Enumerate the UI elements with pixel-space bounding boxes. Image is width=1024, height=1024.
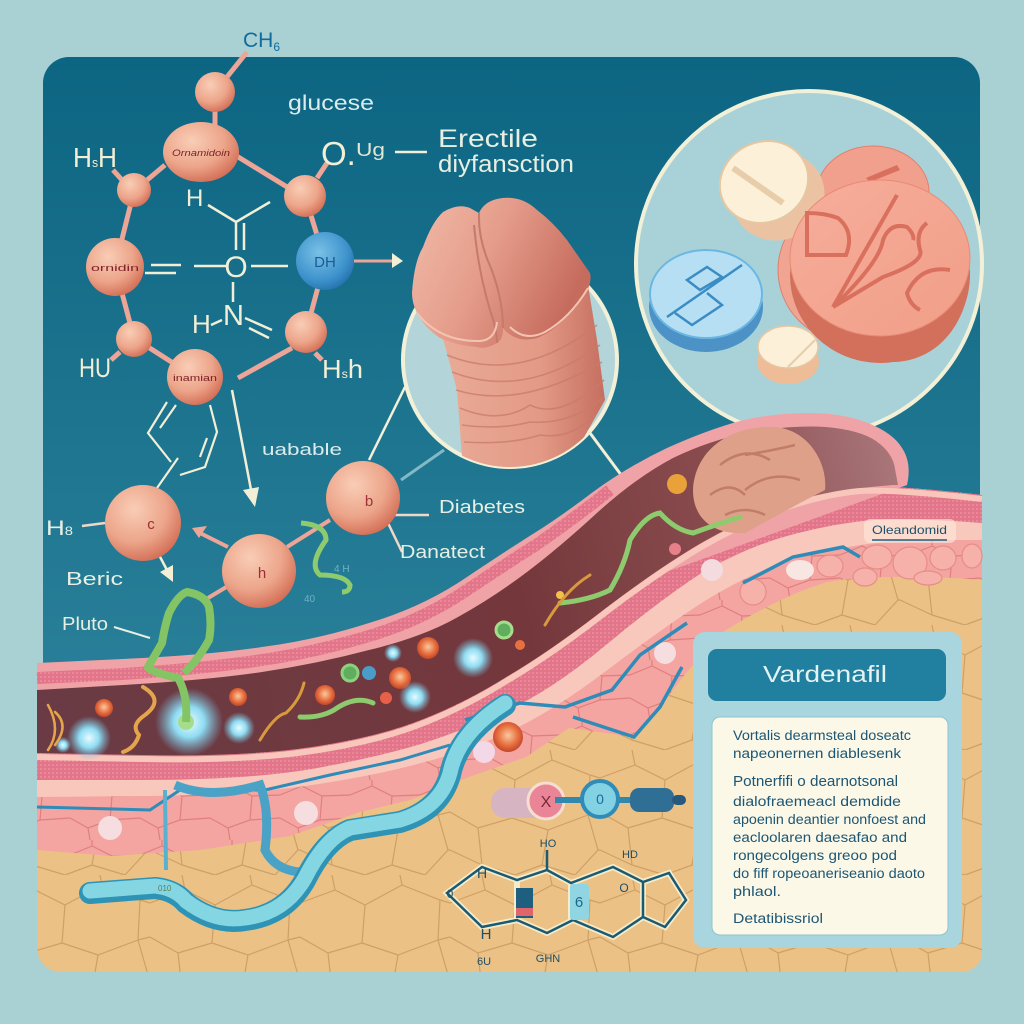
- atom: left node: [86, 238, 144, 296]
- atom: upper right: [284, 175, 326, 217]
- chemical labels: [73, 142, 363, 384]
- icon: back salmon pill: [778, 146, 929, 342]
- faint streak: [401, 450, 444, 480]
- card body: apoenin deantier nonfoest and: [733, 812, 926, 827]
- icon: cream tablet: [706, 127, 839, 256]
- tissue: rounded pink cells: [740, 544, 982, 605]
- illustration: anatomy: [412, 198, 605, 480]
- atom: b: b: [365, 493, 373, 510]
- heading: erectile dysfunction: diyfansction: [438, 151, 574, 178]
- main blue vessel tube: [90, 703, 505, 921]
- atom: left node: ornidin: [91, 263, 139, 273]
- small labels: [304, 564, 350, 605]
- card body: napeonernen diablesenk: [733, 746, 901, 761]
- labels: lower molecule: [46, 497, 525, 634]
- heading: erectile dysfunction: [438, 125, 574, 178]
- main blue vessel tube: 010: [158, 884, 172, 893]
- arrow: cream: [158, 553, 173, 582]
- tissue: striped wall: [37, 487, 982, 780]
- card body: dialofraemeacl demdide: [733, 794, 901, 809]
- inner bonds: [145, 202, 288, 338]
- atom: c: c: [147, 516, 155, 533]
- atom: blue DH: DH: [314, 254, 336, 271]
- tissue: pink cell layer: [37, 495, 982, 856]
- diagram: bottom chemical structure: H: [477, 865, 487, 881]
- diagram: bottom chemical structure: HD: [622, 849, 638, 861]
- lower wall highlight: [37, 491, 982, 759]
- arrow: DH: [354, 253, 403, 268]
- label: tissue tag: [864, 519, 956, 543]
- diagram: bottom chemical structure: O: [619, 881, 629, 895]
- diagram: bottom chemical structure: GHN: [536, 953, 560, 965]
- small labels: 4 H: [334, 564, 350, 575]
- icon: capsule connector: X: [541, 794, 552, 811]
- arrow: pink: [192, 526, 207, 538]
- heading: erectile dysfunction: Erectile: [438, 125, 538, 153]
- labels: lower molecule: Beric: [66, 569, 123, 589]
- blue vessel network: [37, 547, 860, 872]
- tissue: artery upper wall: [37, 413, 909, 700]
- diagram: bottom chemical structure: 6U: [477, 956, 491, 968]
- leader: Pluto: [114, 627, 150, 638]
- icon: small cream tablet: [757, 326, 819, 384]
- squiggle: [301, 523, 350, 592]
- atom: h: [222, 534, 296, 608]
- small labels: 40: [304, 594, 316, 605]
- card body: do fiff ropeoaneriseanio daoto: [733, 866, 925, 881]
- icon: organ blob: [693, 427, 825, 533]
- diagram: bottom chemical structure: HO: [540, 838, 557, 850]
- card body: phlaol.: [733, 884, 781, 899]
- chemical labels: O: [224, 251, 248, 284]
- branch lines: [148, 402, 217, 488]
- card body: [712, 717, 948, 935]
- icon: capsule connector: [491, 781, 686, 819]
- atom: bottom node: inamian: [173, 373, 217, 383]
- label: O.Ug: Ug: [356, 140, 385, 160]
- icon: blue tablet: [649, 250, 763, 352]
- arrow: down: [232, 390, 259, 507]
- artery lumen: [37, 427, 898, 755]
- card heading: Vardenafil: [763, 661, 887, 687]
- chemical labels: N: [223, 300, 244, 332]
- atom: large top node: [163, 122, 239, 182]
- atom: h: h: [258, 565, 266, 582]
- card body: eacloolaren daesafao and: [733, 830, 907, 845]
- label: CH3: CH: [243, 29, 273, 52]
- diagram: lower molecule chain: [82, 461, 429, 608]
- label: tissue tag: Oleandomid: [872, 523, 947, 537]
- atom: bottom node: [167, 349, 223, 405]
- atom: large top node: Ornamidoin: [172, 148, 230, 158]
- atom: upper left: [117, 173, 151, 207]
- circular inset: anatomy background: [403, 253, 617, 467]
- callout line from inset: [369, 387, 405, 460]
- upper wall stripes: [37, 490, 610, 678]
- diagram: bottom chemical structure: H: [481, 926, 491, 943]
- squiggles in lumen: [48, 513, 740, 752]
- tissue: pale dotted band: [37, 487, 982, 797]
- arrow: inset to vessel: [590, 433, 645, 507]
- card body: Detatibissriol: [733, 911, 823, 926]
- atom: c: [105, 485, 181, 561]
- cells: highlighted: [98, 559, 814, 840]
- label: CH3: 6: [273, 40, 280, 54]
- label: usable: uabable: [262, 440, 342, 459]
- atom: b: [326, 461, 400, 535]
- chemical labels: HsH: [73, 142, 117, 173]
- diagram: bottom chemical structure: 0: [447, 887, 454, 901]
- bonds: [82, 515, 429, 552]
- diagram: glucose molecule: [86, 52, 403, 405]
- labels: lower molecule: Danatect: [400, 542, 485, 562]
- green ribbon: [148, 592, 210, 722]
- labels: lower molecule: Pluto: [62, 614, 108, 634]
- diagram: bottom chemical structure: 6: [575, 894, 583, 911]
- card body: Potnerfifi o dearnotsonal: [733, 774, 898, 790]
- icon: large salmon tablet: [790, 180, 970, 363]
- label: O.Ug: O.: [321, 135, 356, 172]
- chemical labels: H: [192, 309, 211, 339]
- bonds: [111, 52, 327, 378]
- card heading: [708, 649, 946, 701]
- large glowing particle: [155, 688, 223, 756]
- circular inset: pills: [636, 91, 982, 437]
- chemical labels: Hsh: [322, 354, 363, 384]
- panel: vardenafil card: [693, 632, 962, 948]
- tissue: fatty layer: [37, 520, 982, 972]
- atom: lower right: [285, 311, 327, 353]
- card body: rongecolgens greoo pod: [733, 848, 897, 863]
- chemical labels: H: [186, 185, 203, 212]
- chemical labels: HU: [79, 353, 111, 383]
- atom: blue DH: [296, 232, 354, 290]
- atom: lower left: [116, 321, 152, 357]
- labels: lower molecule: H 8: [46, 517, 73, 540]
- label: O.Ug: [321, 135, 427, 172]
- atom: top: [195, 72, 235, 112]
- labels: lower molecule: Diabetes: [439, 497, 525, 517]
- icon: capsule connector: 0: [596, 791, 604, 807]
- label: glucose: glucese: [288, 92, 374, 115]
- card body: Vortalis dearmsteal doseatc: [733, 728, 911, 743]
- particles in lumen: [55, 474, 687, 760]
- diagram: bottom chemical structure: [447, 838, 686, 968]
